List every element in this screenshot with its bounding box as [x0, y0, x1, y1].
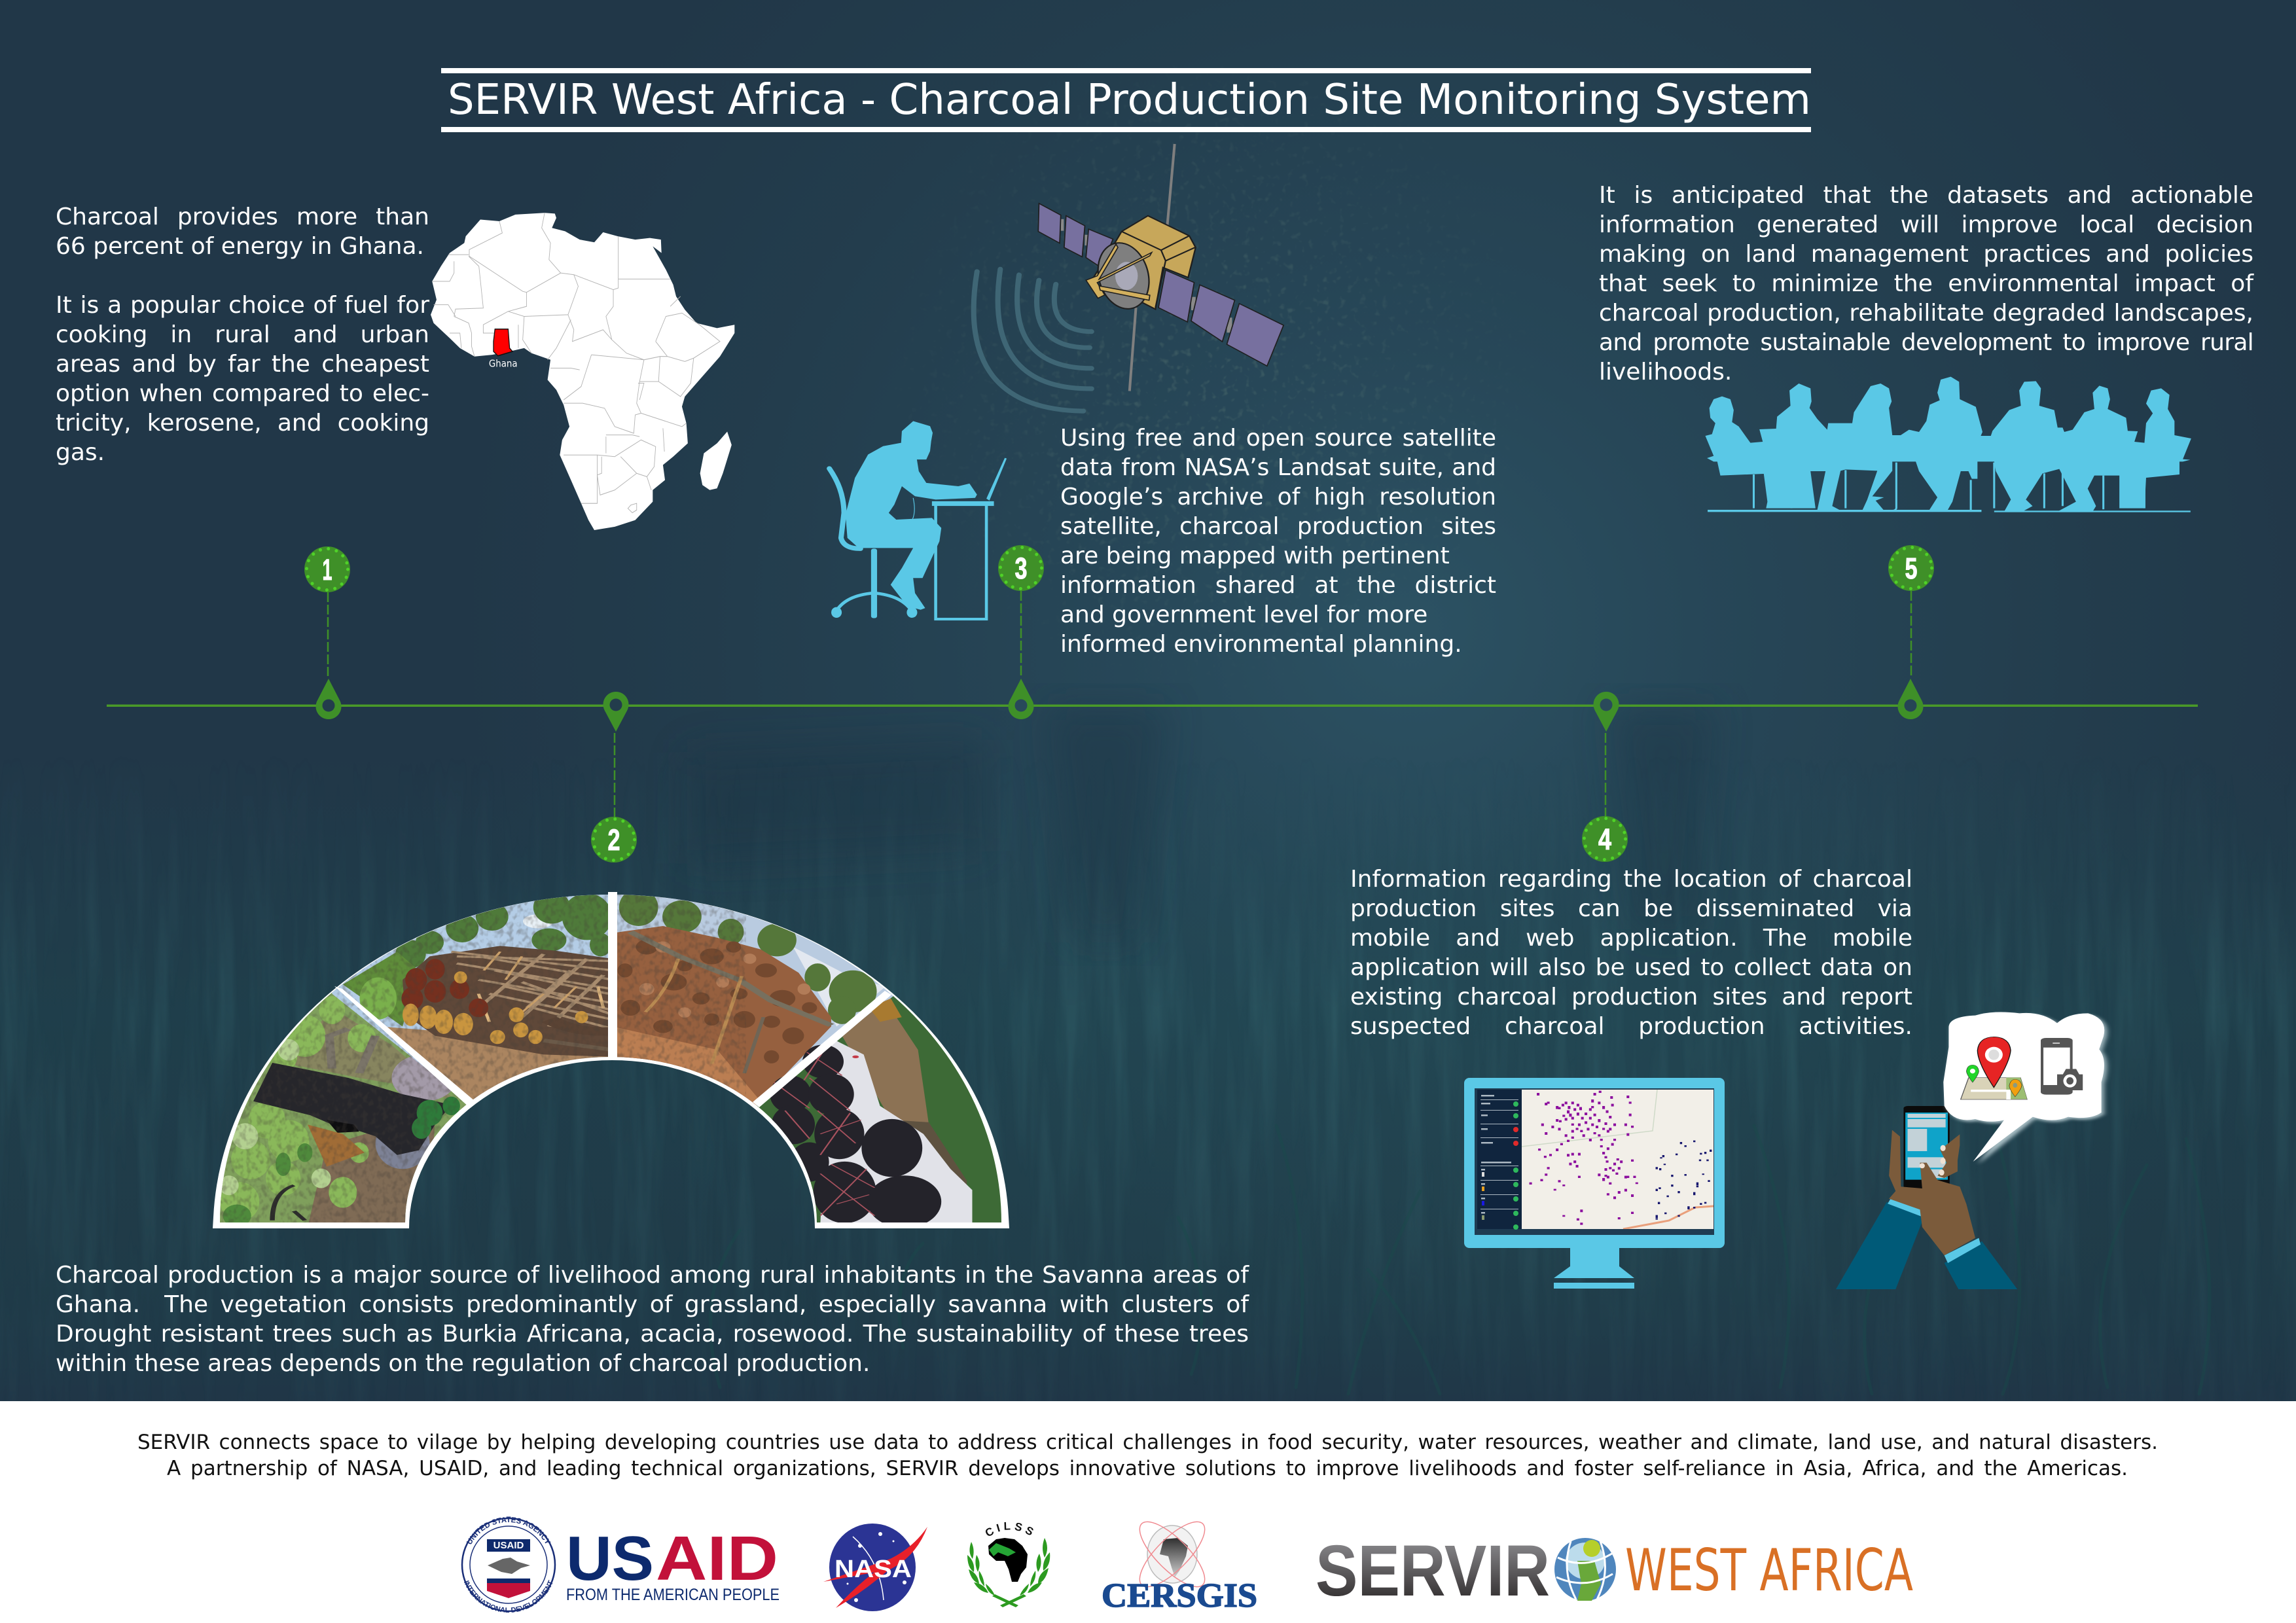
icon: phone with camera — [2041, 1038, 2083, 1095]
logo: CERSGIS: CERSGIS — [1102, 1577, 1257, 1614]
text block: step 3 mapping: and government level for more — [1060, 601, 1427, 628]
logo: USAID seal and wordmark: UNITED STATES AGENCY — [466, 1517, 551, 1544]
text block: step 5 decision making: It is anticipated that the datasets and actionable — [1599, 182, 2253, 209]
icon: meeting table with people silhouettes — [1706, 377, 2191, 512]
text block: step 3 mapping: are being mapped with pertinent — [1060, 543, 1450, 569]
logo: CILSS — [967, 1522, 1050, 1607]
footer background band — [0, 1401, 2296, 1623]
text block: step 3 mapping: Google’s archive of high resolution — [1060, 484, 1496, 510]
text block: step 3 mapping — [1060, 425, 1496, 658]
monitor frame and stand — [1464, 1078, 1725, 1289]
sidebar rows — [1480, 1095, 1518, 1213]
text block: step 5 decision making — [1599, 181, 2253, 387]
text block: step 5 decision making: that seek to minimize the environmental impact of — [1599, 270, 2253, 297]
text block: step 3 mapping: information shared at the district — [1060, 572, 1496, 599]
text block: step 3 mapping: Using free and open source satellite — [1060, 425, 1496, 452]
text block: step 5 decision making: charcoal production, rehabilitate degraded landscapes, — [1599, 300, 2253, 327]
text block: step 1 energy facts — [56, 204, 429, 466]
photo: bagged charcoal in nets — [756, 996, 1001, 1222]
map of Africa with Ghana highlighted: Ghana — [489, 359, 518, 370]
text block: step 2 livelihood — [56, 1262, 1249, 1377]
map of Africa with Ghana highlighted — [431, 213, 734, 530]
step 1 marker: 1 — [322, 553, 332, 586]
footer text — [0, 1401, 2296, 1486]
text block: step 5 decision making: livelihoods. — [1599, 359, 1732, 385]
text block: step 1 energy facts: areas and by far the cheapest — [56, 351, 429, 378]
text block: step 5 decision making: and promote sustainable development to improve rural — [1599, 329, 2253, 356]
logo: SERVIR West Africa: SERVIR — [1316, 1531, 1550, 1611]
text block: step 3 mapping: data from NASA’s Landsat suite, and — [1060, 454, 1496, 481]
logo: USAID seal and wordmark: USAID — [493, 1540, 524, 1551]
text block: step 4 dissemination: production sites can be disseminated via — [1350, 895, 1912, 922]
logo: USAID seal and wordmark: FROM THE AMERICAN PEOPLE — [566, 1586, 780, 1604]
text block: step 1 energy facts: cooking in rural and urban — [56, 321, 429, 348]
text block: step 4 dissemination — [1350, 865, 1912, 1041]
hand — [1889, 1130, 1975, 1255]
text block: step 1 energy facts: 66 percent of energy in Ghana. — [56, 233, 424, 260]
text block: step 2 livelihood: Drought resistant trees such as Burkia Africana, acacia, rosewood. The sustainability of these trees — [56, 1321, 1249, 1347]
text block: step 4 dissemination: suspected charcoal production activities. — [1350, 1013, 1912, 1040]
text block: step 1 energy facts: tricity, kerosene, and cooking — [56, 410, 429, 437]
step 5 marker — [1888, 545, 1934, 719]
text block: step 4 dissemination: existing charcoal production sites and report — [1350, 984, 1912, 1010]
step 3 marker — [998, 545, 1044, 719]
title banner: SERVIR West Africa - Charcoal Production Site Monitoring System — [448, 76, 1811, 124]
photo: pile of cut logs — [332, 895, 608, 1099]
text block: step 3 mapping: informed environmental planning. — [1060, 631, 1462, 658]
logo: USAID seal and wordmark: INTERNATIONAL DEVELOPMENT — [464, 1580, 552, 1613]
logo: CERSGIS — [1102, 1512, 1257, 1614]
text block: step 5 decision making: information generated will improve local decision — [1599, 211, 2253, 238]
logo: USAID seal and wordmark: US — [566, 1524, 654, 1594]
panel: photo arch of charcoal production — [213, 892, 1009, 1228]
step 2 marker — [591, 692, 637, 863]
text block: step 4 dissemination: Information regarding the location of charcoal — [1350, 866, 1912, 893]
text block: step 1 energy facts: Charcoal provides more than — [56, 204, 429, 230]
logo: SERVIR West Africa — [1316, 1531, 1913, 1611]
icon: hands holding a smartphone with speech bubble — [1836, 1012, 2107, 1289]
text block: step 2 livelihood: Charcoal production is a major source of livelihood among rural inhabitants in the Savanna areas of — [56, 1262, 1249, 1289]
icon: satellite with signal waves — [974, 144, 1283, 411]
icon: person working at a laptop — [829, 421, 1007, 619]
photo: burning tree trunk — [220, 971, 466, 1222]
text block: step 4 dissemination: application will also be used to collect data on — [1350, 954, 1912, 981]
text block: step 1 energy facts: It is a popular choice of fuel for — [56, 292, 429, 319]
footer sentence 2: A partnership of NASA, USAID, and leading technical organizations, SERVIR develops innovative solutions to improve livelihoods and foster self-reliance in Asia, Africa, and the Americas. — [167, 1457, 2128, 1480]
step 4 marker — [1582, 692, 1628, 862]
logo: NASA: NASA — [834, 1556, 912, 1583]
step 1 marker — [304, 546, 350, 719]
logo: SERVIR West Africa: WEST AFRICA — [1625, 1537, 1913, 1604]
step 4 marker: 4 — [1598, 823, 1611, 856]
map panel — [1522, 1090, 1713, 1229]
sleeves — [1836, 1202, 2017, 1289]
text block: step 3 mapping: satellite, charcoal production sites — [1060, 513, 1496, 540]
logo: USAID seal and wordmark — [461, 1517, 780, 1613]
timeline axis — [107, 704, 2198, 707]
logo: NASA — [823, 1524, 927, 1611]
text block: step 5 decision making: making on land management practices and policies — [1599, 241, 2253, 268]
text block: step 2 livelihood: Ghana. The vegetation consists predominantly of grassland, especially savanna with clusters of — [56, 1291, 1249, 1318]
icon: map with location pins — [1961, 1037, 2027, 1099]
footer sentence 1: SERVIR connects space to vilage by helping developing countries use data to address critical challenges in food security, water resources, weather and climate, land use, and natural disasters. — [137, 1431, 2158, 1454]
speech bubble — [1946, 1014, 2107, 1164]
text block: step 4 dissemination: mobile and web application. The mobile — [1350, 925, 1912, 952]
step 3 marker: 3 — [1014, 552, 1028, 585]
step 5 marker: 5 — [1905, 552, 1918, 585]
text block: step 1 energy facts: gas. — [56, 439, 105, 466]
phone — [1903, 1106, 1950, 1188]
text block: step 2 livelihood: within these areas depends on the regulation of charcoal production. — [56, 1350, 870, 1377]
text block: step 1 energy facts: option when compared to elec- — [56, 380, 429, 407]
logo: CILSS: CILSS — [986, 1522, 1033, 1536]
photo: earth-covered charcoal kiln — [613, 877, 896, 1106]
logo: USAID seal and wordmark: AID — [656, 1524, 778, 1594]
step 2 marker: 2 — [607, 823, 620, 857]
icon: desktop monitor showing the web map — [1464, 1078, 1725, 1289]
